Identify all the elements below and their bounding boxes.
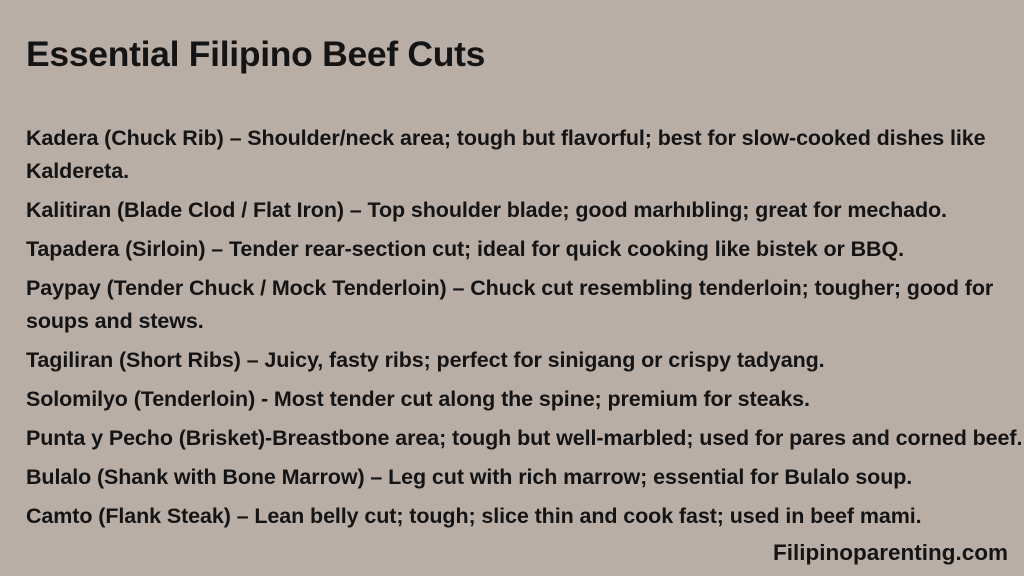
footer: site credit: Filipinoparenting.com	[773, 540, 1008, 565]
item: Camto: Camto (Flank Steak) – Lean belly cut; tough; slice thin and cook fast; used in beef mami.	[26, 504, 921, 528]
item: Kalitiran: Kalitiran (Blade Clod / Flat Iron) – Top shoulder blade; good marhıbling; great for mechado.	[26, 198, 947, 222]
item: Punta y Pecho: Punta y Pecho (Brisket)-Breastbone area; tough but well-marbled; used for pares and corned beef.	[26, 426, 1022, 450]
item: Paypay: soups and stews.	[26, 308, 204, 332]
item: Kadera: Kaldereta.	[26, 158, 129, 182]
item: Bulalo: Bulalo (Shank with Bone Marrow) – Leg cut with rich marrow; essential for Bulalo soup.	[26, 464, 912, 488]
title: Essential Filipino Beef Cuts	[26, 34, 485, 74]
text block: beef cuts list	[26, 126, 1022, 528]
item: Tapadera: Tapadera (Sirloin) – Tender rear-section cut; ideal for quick cooking like bistek or BBQ.	[26, 236, 904, 260]
item: Paypay	[26, 276, 993, 332]
item: Solomilyo: Solomilyo (Tenderloin) - Most tender cut along the spine; premium for steaks.	[26, 386, 810, 410]
item: Kadera: Kadera (Chuck Rib) – Shoulder/neck area; tough but flavorful; best for slow-cooked dishes like	[26, 126, 985, 150]
item: Kadera	[26, 126, 985, 182]
item: Tagiliran: Tagiliran (Short Ribs) – Juicy, fasty ribs; perfect for sinigang or crispy tadyang.	[26, 348, 825, 372]
item: Paypay: Paypay (Tender Chuck / Mock Tenderloin) – Chuck cut resembling tenderloin; tougher; good for	[26, 276, 993, 300]
